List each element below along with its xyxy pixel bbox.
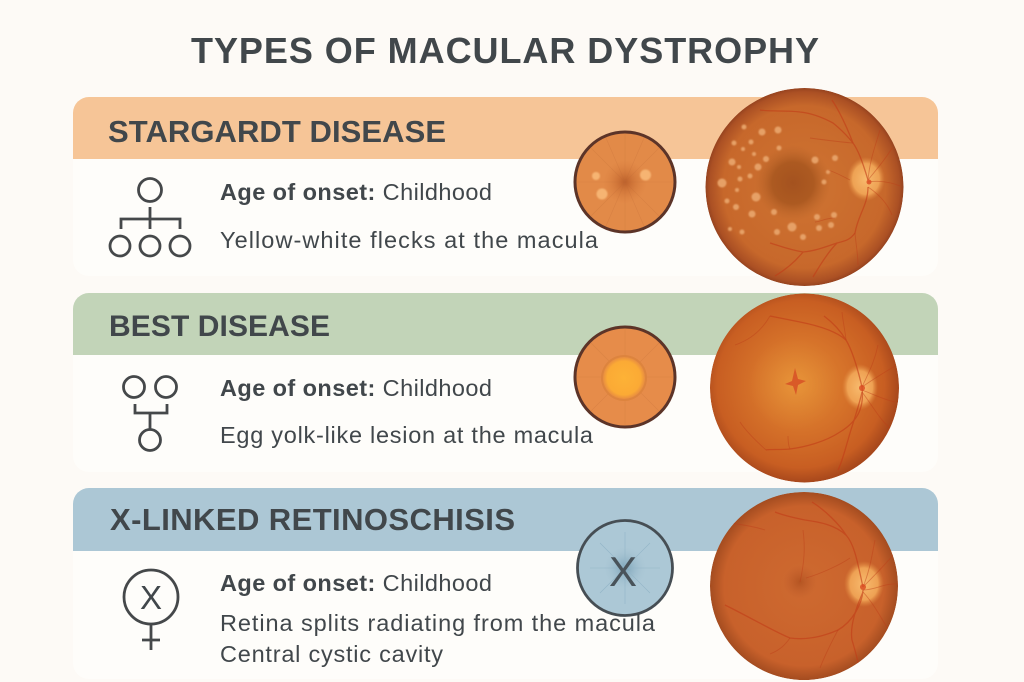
small macula detail with X: X: [609, 548, 637, 595]
card body: [73, 488, 938, 679]
heading: BEST DISEASE: [109, 310, 330, 343]
age of onset: Age of onset: Childhood: [220, 375, 492, 401]
card body: [73, 293, 938, 472]
heading band: [73, 488, 938, 551]
age of onset: Age of onset: Childhood: [220, 179, 492, 205]
panel: Best disease: [73, 293, 938, 482]
large fundus image with yolk-like lesion: [710, 294, 899, 482]
description line 1: Retina splits radiating from the macula: [220, 610, 656, 636]
icon: pedigree with one parent and three children: [110, 178, 190, 256]
macular star: [785, 368, 806, 395]
heading band: [73, 293, 938, 355]
description: Egg yolk-like lesion at the macula: [220, 422, 594, 448]
small macula detail with X: [578, 520, 672, 616]
icon: X chromosome in female symbol: X: [140, 579, 162, 616]
heading band: [73, 97, 938, 159]
icon: X chromosome in female symbol: [124, 570, 178, 650]
panel: Stargardt disease: [73, 88, 938, 286]
icon: pedigree with two parents and one child: [124, 376, 176, 450]
description line 2: Central cystic cavity: [220, 641, 443, 667]
large fundus image: [710, 492, 898, 680]
small macula detail: [575, 327, 675, 427]
large fundus image with flecks: [706, 88, 904, 286]
small macula detail: [575, 132, 675, 232]
description: Yellow-white flecks at the macula: [220, 227, 599, 253]
age of onset: Age of onset: Childhood: [220, 570, 492, 596]
title: TYPES OF MACULAR DYSTROPHY: [191, 30, 819, 71]
heading: X-LINKED RETINOSCHISIS: [110, 502, 515, 537]
panel: X-linked retinoschisis: [73, 488, 938, 680]
card body: [73, 97, 938, 276]
heading: STARGARDT DISEASE: [108, 114, 446, 149]
